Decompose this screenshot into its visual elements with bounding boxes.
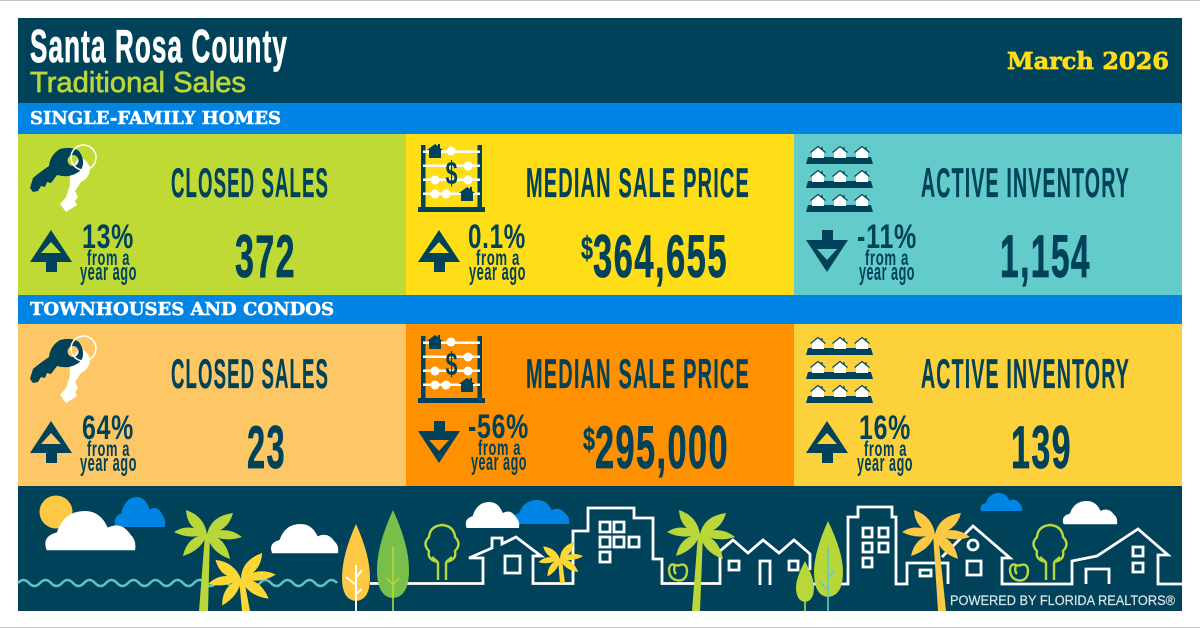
value: $: [581, 230, 593, 266]
waves: [18, 580, 337, 586]
value: [583, 414, 729, 481]
change text: -56%: [468, 408, 529, 446]
panel: townhouse median sale price: MEDIAN SALE PRICE: [526, 350, 750, 397]
change text: year ago: [469, 259, 526, 286]
change text: year ago: [859, 259, 915, 286]
value: $: [583, 421, 595, 457]
leaf trees: [342, 510, 843, 611]
icon: abacus: [418, 144, 485, 212]
icon: up arrow: [30, 230, 72, 272]
palm trees: [174, 510, 970, 611]
change text: from a: [87, 247, 130, 270]
change text: [857, 218, 917, 286]
change text: [80, 409, 137, 477]
value: [581, 223, 728, 290]
panel: townhouse active inventory: [794, 324, 1182, 486]
value: 295,000: [595, 414, 729, 481]
icon: keys: [30, 145, 96, 212]
change text: year ago: [80, 259, 137, 286]
section band: single-family homes: SINGLE-FAMILY HOMES: [30, 108, 281, 129]
subtitle: Traditional Sales: [30, 67, 246, 99]
icon: abacus: [418, 335, 485, 403]
change text: 0.1%: [468, 218, 526, 256]
change text: from a: [478, 437, 521, 460]
change text: 13%: [82, 218, 134, 256]
icon: down arrow: [806, 230, 848, 272]
change text: year ago: [80, 450, 137, 477]
scene: coastal town skyline: [18, 486, 1182, 611]
icon: down arrow: [418, 421, 460, 463]
icon: up arrow: [30, 421, 72, 463]
change text: 16%: [859, 409, 911, 447]
value: 23: [247, 414, 286, 481]
change text: from a: [865, 247, 909, 270]
section band: townhouses and condos: TOWNHOUSES AND CONDOS: [30, 299, 334, 320]
value: 372: [235, 223, 296, 290]
change text: [80, 218, 137, 286]
icon: keys: [30, 336, 96, 403]
credit line: POWERED BY FLORIDA REALTORS®: [950, 593, 1175, 608]
value: 1,154: [1000, 223, 1091, 290]
panel: single-family median sale price: [406, 134, 794, 295]
section band: townhouses and condos: [18, 295, 1182, 324]
skyline outline: [370, 507, 1182, 585]
panel: single-family median sale price: MEDIAN SALE PRICE: [526, 159, 750, 206]
title: Santa Rosa County: [30, 20, 288, 72]
clouds: [45, 493, 1117, 553]
header band: [18, 18, 1182, 103]
change text: from a: [476, 247, 520, 270]
outline trees and bushes: [426, 525, 1066, 580]
change text: 64%: [82, 409, 134, 447]
panel: single-family closed sales: CLOSED SALES: [171, 159, 329, 206]
value: 364,655: [593, 223, 728, 290]
change text: [468, 218, 526, 286]
sun: [40, 496, 72, 528]
panel: single-family closed sales: [18, 134, 406, 295]
panel: townhouse closed sales: [18, 324, 406, 486]
change text: [857, 409, 913, 477]
change text: year ago: [471, 449, 527, 476]
section band: single-family homes: [18, 103, 1182, 134]
icon: rows of houses: [806, 337, 873, 403]
panel: single-family active inventory: [794, 134, 1182, 295]
icon: up arrow: [806, 421, 848, 463]
change text: from a: [87, 438, 130, 461]
panel: townhouse median sale price: [406, 324, 794, 486]
change text: [468, 408, 529, 476]
date: March 2026: [1007, 48, 1169, 75]
change text: year ago: [857, 450, 913, 477]
change text: from a: [864, 438, 907, 461]
change text: -11%: [857, 218, 917, 256]
icon: up arrow: [418, 230, 460, 272]
value: 139: [1011, 414, 1072, 481]
icon: rows of houses: [806, 146, 873, 212]
panel: townhouse closed sales: CLOSED SALES: [171, 350, 329, 397]
